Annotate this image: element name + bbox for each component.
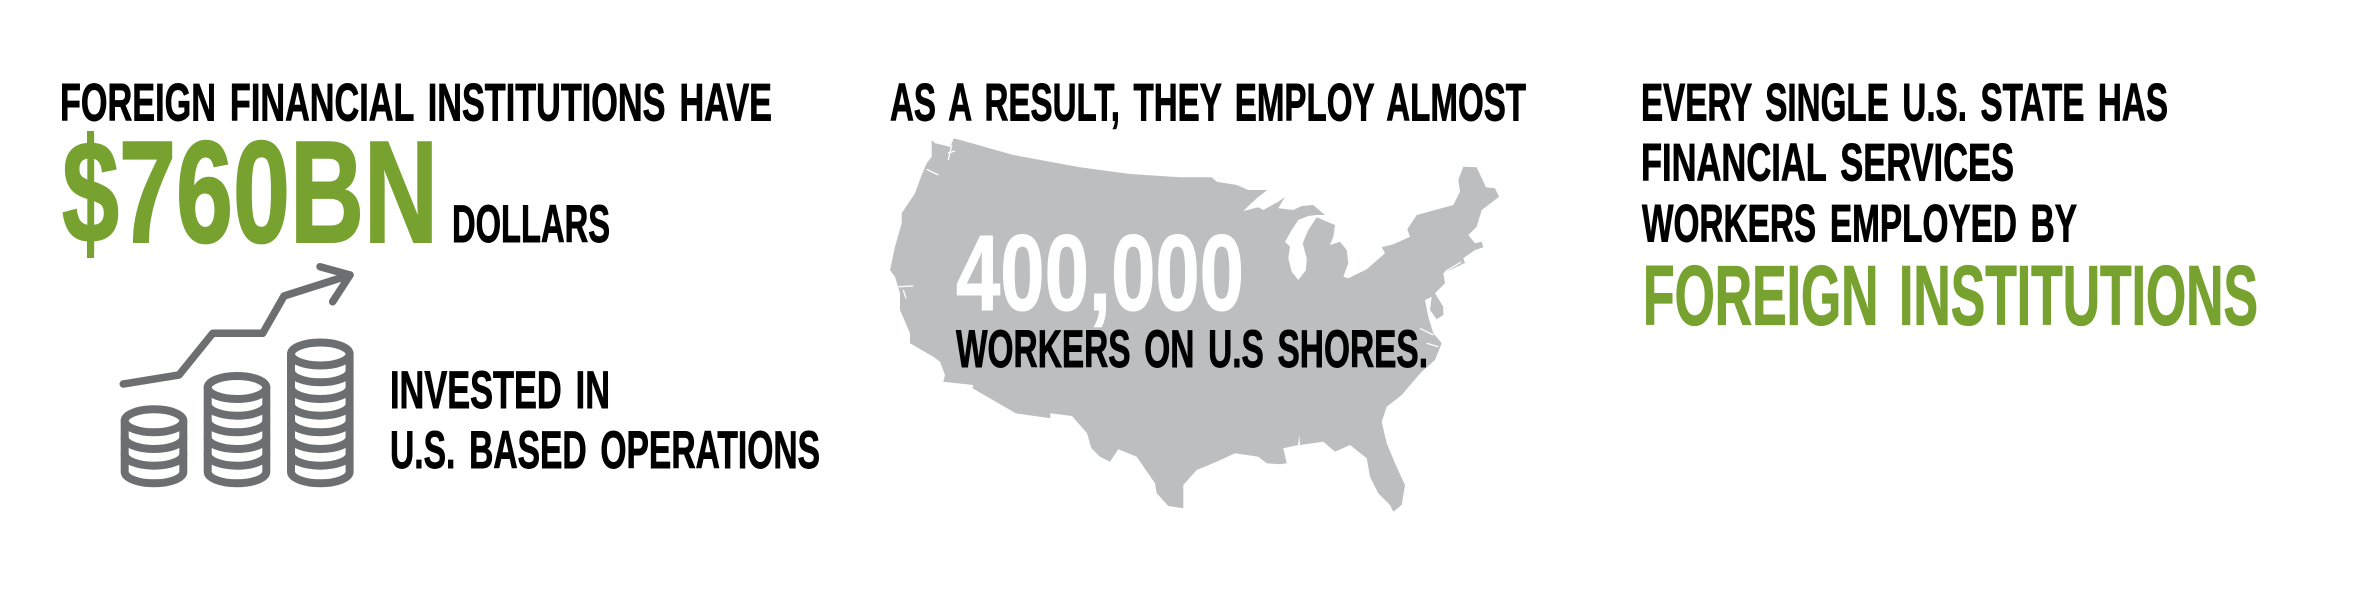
label: dollars: DOLLARS [452, 195, 610, 254]
icon: coin stack medium [208, 376, 266, 483]
big number: $760BN: $760BN [62, 111, 438, 273]
panel: every state [1641, 74, 2258, 342]
text: every single u.s. state has financial services workers employed by: WORKERS EMPLOYED BY [1642, 195, 2077, 254]
heading: as a result: AS A RESULT, THEY EMPLOY ALMOST [890, 74, 1526, 133]
text: every single u.s. state has financial services workers employed by: FINANCIAL SERVICES [1641, 134, 2014, 193]
text: every single u.s. state has financial services workers employed by [1641, 74, 2168, 254]
icon: coin stack tall [291, 342, 350, 483]
text: invested in u.s. based operations [390, 361, 820, 480]
text: workers on u.s shores: WORKERS ON U.S SHORES. [956, 320, 1428, 379]
icon: coin stack small [125, 409, 183, 483]
panel: employment [890, 74, 1526, 512]
text: invested in u.s. based operations: INVESTED IN [390, 361, 610, 420]
icon: rising arrow over coin stacks [123, 267, 350, 483]
icon: rising arrow [123, 267, 350, 384]
map: contiguous united states [890, 138, 1499, 512]
big number: 400,000: 400,000 [956, 213, 1244, 333]
text: invested in u.s. based operations: U.S. BASED OPERATIONS [390, 421, 820, 480]
panel: investment [60, 74, 820, 483]
heading: foreign financial institutions have: FOREIGN FINANCIAL INSTITUTIONS HAVE [60, 74, 772, 133]
